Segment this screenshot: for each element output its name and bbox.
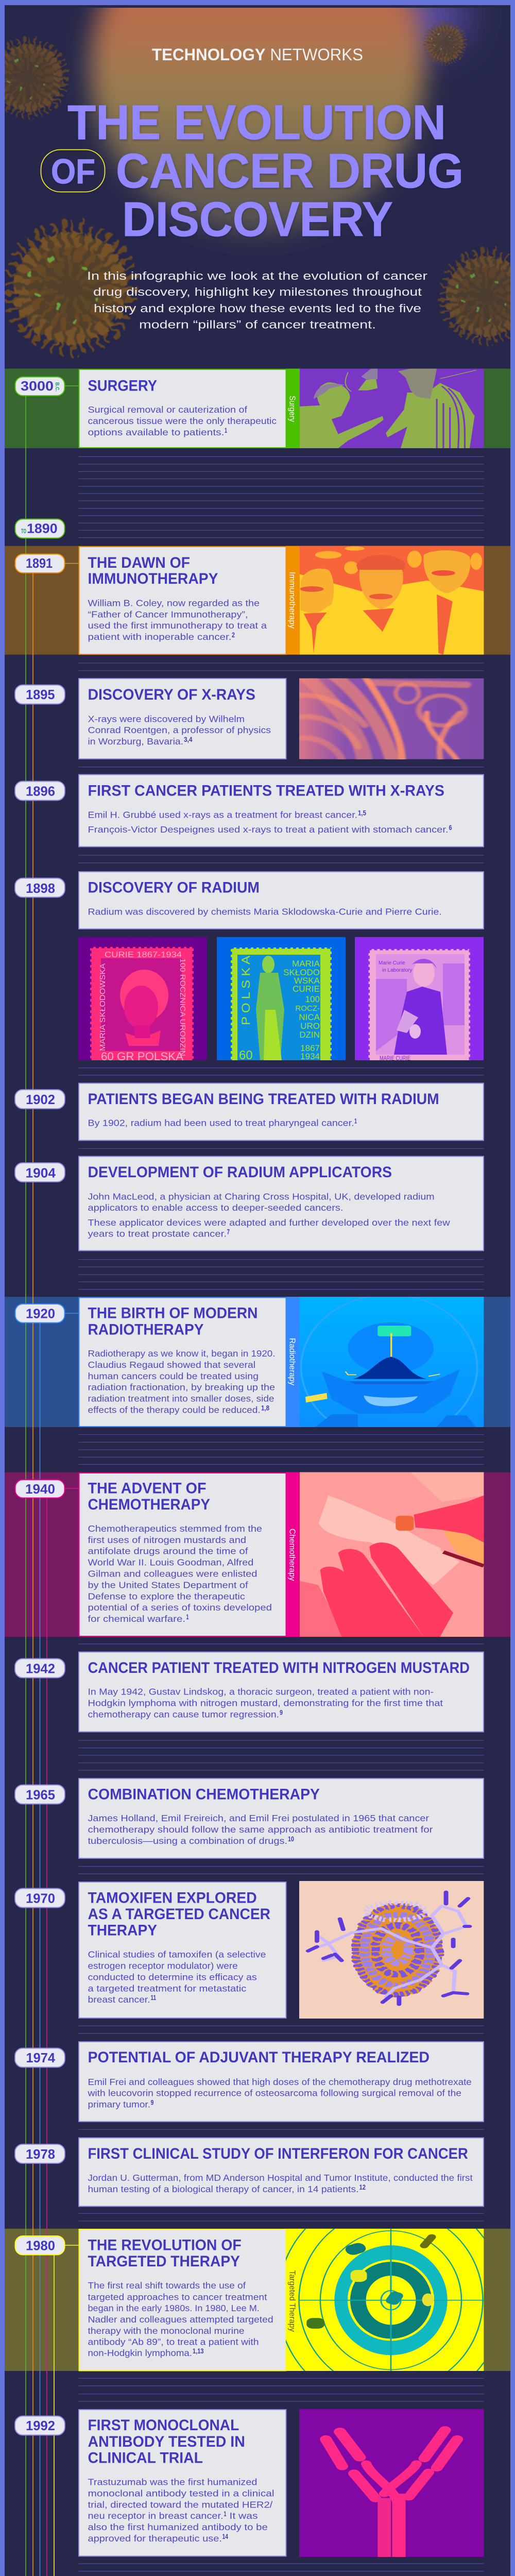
- body text: began in the early 1980s. In 1980, Lee M.: [88, 2303, 260, 2313]
- image: green Curie stamp: URO: [300, 1021, 320, 1031]
- category tag: Targeted Therapy: [287, 2270, 297, 2332]
- heading: PATIENTS BEGAN BEING TREATED WITH RADIUM: [88, 1091, 439, 1108]
- heading: TAMOXIFEN EXPLORED: [88, 1890, 257, 1907]
- event: 1896 first patients treated: [15, 775, 484, 847]
- body text: In May 1942, Gustav Lindskog, a thoracic surgeon, treated a patient with non-: [88, 1686, 434, 1697]
- body text: 1: [186, 1613, 189, 1621]
- heading: CHEMOTHERAPY: [88, 1496, 210, 1513]
- year pill: 1974: [26, 2050, 56, 2065]
- intro text: drug discovery, highlight key milestones throughout: [93, 285, 422, 298]
- image: pink Curie stamp: CURIE 1867-1934: [105, 951, 182, 959]
- event: 1965 combination chemotherapy: [15, 1778, 484, 1858]
- body text: trial, directed toward the mutated HER2/: [88, 2500, 272, 2510]
- category tag: Chemotherapy: [287, 1529, 297, 1581]
- body text: also the first humanized antibody to be: [88, 2522, 268, 2532]
- icon: cancer cell lower left: [9, 226, 132, 350]
- year pill: 1965: [26, 1787, 55, 1802]
- body text: Defense to explore the therapeutic: [88, 1591, 245, 1602]
- event: 1920 birth of radiotherapy: [15, 1295, 484, 1440]
- heading: IMMUNOTHERAPY: [88, 570, 218, 587]
- body text: human cancers could be treated using: [88, 1371, 259, 1381]
- image: purple Curie stamp: MARIE CURIE: [380, 1055, 410, 1062]
- year pill: [15, 1480, 65, 1498]
- body text: radiation treatment into smaller doses, side: [88, 1394, 274, 1404]
- icon: cancer cell top right: [425, 23, 465, 63]
- header glow and cells: [0, 0, 515, 350]
- body text: with leucovorin stopped recurrence of osteosarcoma following surgical removal of the: [87, 2088, 461, 2098]
- event: to 1890 pill: [15, 519, 65, 538]
- body text: therapy with the monoclonal murine: [88, 2326, 244, 2336]
- body text: antibody “Ab 89”, to treat a patient with: [88, 2337, 259, 2347]
- body text: The first real shift towards the use of: [88, 2280, 246, 2291]
- year pill: 1980: [26, 2238, 55, 2253]
- body text: Trastuzumab was the first humanized: [88, 2477, 257, 2487]
- title: [41, 95, 464, 247]
- image: green Curie stamp: [217, 937, 346, 1062]
- icon: cancer cell top left: [0, 41, 65, 115]
- body text: Nadler and colleagues attempted targeted: [88, 2314, 273, 2325]
- card: [79, 369, 286, 448]
- year pill: 1896: [26, 784, 55, 799]
- event: 1940 advent of chemotherapy: [15, 1472, 484, 1637]
- image: radiotherapy mask: [300, 1297, 484, 1427]
- body text: John MacLeod, a physician at Charing Cross Hospital, UK, developed radium: [88, 1191, 435, 1201]
- category tag: [286, 1472, 300, 1637]
- image: green Curie stamp: 1867: [300, 1043, 320, 1053]
- heading: CLINICAL TRIAL: [88, 2449, 203, 2467]
- body text: 12: [359, 2183, 366, 2191]
- body text: Radiotherapy as we know it, began in 1920.: [88, 1348, 275, 1359]
- heading: DEVELOPMENT OF RADIUM APPLICATORS: [88, 1164, 392, 1181]
- body text: [88, 1813, 433, 1846]
- image: pink Curie stamp: [78, 937, 207, 1063]
- heading: DISCOVERY OF X-RAYS: [88, 686, 255, 703]
- heading: COMBINATION CHEMOTHERAPY: [88, 1786, 320, 1803]
- card: [79, 1473, 286, 1636]
- year pill: [15, 1163, 65, 1182]
- heading: THE DAWN OF: [88, 554, 190, 571]
- heading: TARGETED THERAPY: [88, 2253, 240, 2270]
- body text: Jordan U. Gutterman, from MD Anderson Hospital and Tumor Institute, conducted the first: [88, 2173, 473, 2183]
- year pill: [15, 781, 65, 801]
- image: pink Curie stamp: MARIA SKŁODOWSKA: [98, 963, 107, 1051]
- event: 1902 treated with radium: [15, 1083, 484, 1141]
- heading: THE ADVENT OF: [88, 1480, 206, 1497]
- body text: neu receptor in breast cancer.: [88, 2511, 224, 2521]
- event: 1980 targeted therapy: [15, 2191, 504, 2409]
- heading: DISCOVERY OF RADIUM: [88, 879, 260, 896]
- body text: targeted approaches to cancer treatment: [88, 2292, 267, 2302]
- year pill: [15, 1659, 65, 1677]
- image: tamoxifen molecule and cell: [299, 1881, 484, 2019]
- body text: Surgical removal or cauterization of: [88, 404, 247, 415]
- body text: [88, 1348, 275, 1415]
- card: [79, 2138, 484, 2206]
- icon: cancer cell lower right: [442, 252, 515, 341]
- image: purple Curie stamp: [355, 937, 484, 1062]
- card: [79, 2410, 286, 2556]
- image: purple Curie stamp: in Laboratory: [382, 968, 412, 973]
- heading: CANCER PATIENT TREATED WITH NITROGEN MUSTARD: [88, 1659, 470, 1676]
- event: 3000 BC surgery: [15, 369, 484, 448]
- body text: 2: [232, 631, 235, 639]
- body text: [88, 1191, 450, 1239]
- body text: 6: [449, 823, 452, 832]
- image: target with pills: [286, 2229, 484, 2371]
- year pill: 1940: [25, 1481, 55, 1497]
- image: portrait of three men: [300, 546, 484, 655]
- event: 1891 dawn of immunotherapy: [15, 546, 484, 655]
- body text: [88, 2477, 274, 2544]
- body text: antifolate drugs around the time of: [88, 1546, 248, 1556]
- body text: X-rays were discovered by Wilhelm: [88, 714, 245, 724]
- body text: primary tumor.: [88, 2099, 150, 2110]
- image: purple Curie stamp: Marie Curie: [379, 960, 405, 966]
- category tag: Radiotherapy: [287, 1338, 297, 1385]
- card: [79, 2042, 484, 2122]
- intro text: modern “pillars” of cancer treatment.: [139, 318, 376, 331]
- body text: Claudius Regaud showed that several: [88, 1360, 255, 1370]
- year pill: 1942: [26, 1661, 55, 1676]
- event: 1904 radium applicators: [15, 1156, 484, 1251]
- body text: Radium was discovered by chemists Maria Sklodowska-Curie and Pierre Curie.: [88, 907, 442, 917]
- image: green Curie stamp: 1934: [300, 1052, 320, 1061]
- card: [79, 1882, 286, 2018]
- image: green Curie stamp: 60: [239, 1048, 253, 1062]
- year pill: [15, 878, 65, 897]
- body text: conducted to determine its efficacy as: [88, 1972, 257, 1982]
- body text: These applicator devices were adapted and further developed over the next few: [88, 1217, 450, 1228]
- coloured timeline routes into pillars: [26, 386, 443, 2576]
- year pill: 1904: [26, 1165, 56, 1181]
- body text: monoclonal antibody tested in a clinical: [88, 2488, 274, 2499]
- year pill: 1992: [26, 2418, 55, 2433]
- year pill: [15, 1785, 65, 1804]
- body text: 9: [280, 1708, 283, 1716]
- heading: [88, 1480, 210, 1513]
- body text: 1,5: [358, 809, 366, 817]
- heading: POTENTIAL OF ADJUVANT THERAPY REALIZED: [88, 2049, 430, 2066]
- card: [79, 1297, 286, 1427]
- category tag: Immunotherapy: [287, 572, 297, 629]
- heading: FIRST MONOCLONAL: [88, 2417, 239, 2434]
- body text: Emil Frei and colleagues showed that high doses of the chemotherapy drug methotrexate: [88, 2077, 472, 2087]
- body text: first uses of nitrogen mustards and: [88, 1535, 246, 1545]
- card: [79, 1778, 484, 1858]
- body text: approved for therapeutic use.: [88, 2533, 222, 2544]
- body text: Conrad Roentgen, a professor of physics: [88, 725, 271, 735]
- body text: potential of a series of toxins developed: [88, 1602, 272, 1613]
- event: to 1890 pill: 1890: [27, 521, 58, 536]
- category tag: Surgery: [287, 396, 297, 422]
- image: pink Curie stamp: 100 ROCZNICA URODZIN: [178, 958, 187, 1056]
- body text: 10: [288, 1835, 294, 1843]
- image: green Curie stamp: CURIE: [293, 984, 320, 994]
- image: green Curie stamp: 100: [305, 994, 320, 1004]
- body text: used the first immunotherapy to treat a: [88, 620, 267, 631]
- body text: [88, 598, 267, 642]
- event: 1898 discovery of radium: [15, 872, 484, 1071]
- event: 1992 monoclonal antibody: [15, 2409, 484, 2557]
- year pill: [15, 2048, 65, 2067]
- body text: William B. Coley, now regarded as the: [88, 598, 260, 608]
- category tag: [286, 1297, 300, 1427]
- heading: SURGERY: [88, 378, 157, 395]
- body text: chemotherapy can cause tumor regression.: [88, 1709, 279, 1719]
- body text: World War II. Louis Goodman, Alfred: [88, 1557, 253, 1568]
- heading: [88, 554, 218, 587]
- intro text: [87, 269, 427, 331]
- body text: effects of the therapy could be reduced.: [88, 1405, 261, 1415]
- image: pink Curie stamp: 60 GR POLSKA: [101, 1050, 183, 1063]
- image: chest x-ray: [299, 678, 484, 759]
- intro text: history and explore how these events led to the five: [94, 302, 421, 315]
- body text: breast cancer.: [88, 1994, 150, 2005]
- body text: patient with inoperable cancer.: [88, 632, 232, 642]
- heading: RADIOTHERAPY: [88, 1321, 204, 1338]
- image: green Curie stamp: WSKA: [294, 976, 320, 986]
- body text: 11: [150, 1993, 156, 2002]
- year pill: B.C.: [54, 382, 60, 392]
- image: gloved hands placing IV: [300, 1472, 484, 1637]
- body text: It was: [230, 2511, 258, 2521]
- body text: 14: [222, 2532, 228, 2540]
- body text: 1,8: [261, 1404, 269, 1412]
- body text: [88, 1686, 443, 1719]
- card: [79, 1652, 484, 1732]
- card: [79, 1156, 484, 1251]
- year pill: [15, 2144, 65, 2163]
- heading: FIRST CLINICAL STUDY OF INTERFERON FOR CANCER: [88, 2145, 468, 2162]
- body text: Gilman and colleagues were enlisted: [88, 1569, 258, 1579]
- body text: radiation fractionation, by breaking up the: [88, 1382, 275, 1393]
- title: THE EVOLUTION: [67, 95, 446, 150]
- year pill: [15, 1090, 65, 1109]
- year pill: [15, 554, 65, 573]
- year pill: 1920: [26, 1306, 55, 1321]
- heading: AS A TARGETED CANCER: [88, 1906, 270, 1923]
- card: [79, 775, 484, 847]
- title: OF: [51, 152, 95, 191]
- body text: Emil H. Grubbé used x-rays as a treatment for breast cancer.: [88, 810, 357, 820]
- image: green Curie stamp: NICA: [299, 1012, 320, 1022]
- event: 1970 tamoxifen: [15, 1881, 484, 2019]
- image: ancient vase figures: [300, 369, 484, 448]
- body text: for chemical warfare.: [88, 1614, 185, 1624]
- year pill: [15, 1889, 65, 1907]
- body text: [88, 1949, 266, 2005]
- year pill: 1898: [26, 880, 55, 896]
- body text: Hodgkin lymphoma with nitrogen mustard, demonstrating for the first time that: [88, 1698, 443, 1708]
- body text: [88, 404, 277, 437]
- heading: ANTIBODY TESTED IN: [88, 2433, 245, 2450]
- image: green Curie stamp: ROCZ-: [296, 1004, 320, 1013]
- year pill: [15, 2236, 65, 2255]
- body text: by the United States Department of: [88, 1580, 248, 1590]
- heading: THERAPY: [88, 1922, 157, 1939]
- category tag: [286, 546, 300, 655]
- card: [79, 1083, 484, 1141]
- year pill: [15, 2416, 65, 2435]
- body text: “Father of Cancer Immunotherapy”,: [88, 609, 248, 619]
- year pill: [15, 685, 65, 704]
- event: 1974 adjuvant therapy: [15, 2042, 484, 2122]
- year pill: [15, 377, 65, 396]
- year pill: 1891: [26, 555, 53, 571]
- body text: [88, 1523, 272, 1624]
- body text: chemotherapy should follow the same approach as antibiotic treatment for: [88, 1824, 433, 1835]
- heading: [88, 2417, 245, 2467]
- body text: estrogen receptor modulator) were: [88, 1960, 238, 1971]
- body text: [88, 2173, 473, 2194]
- image: antibody: [299, 2409, 484, 2557]
- card: [79, 679, 286, 759]
- year pill: 1895: [26, 687, 55, 702]
- body text: 1: [354, 1117, 357, 1125]
- heading: THE REVOLUTION OF: [88, 2237, 242, 2254]
- body text: 1: [224, 2510, 227, 2518]
- body text: 7: [227, 1228, 230, 1236]
- body text: [88, 809, 452, 835]
- title: DISCOVERY: [122, 192, 393, 247]
- body text: in Worzburg, Bavaria.: [88, 736, 183, 747]
- separator rules: [78, 456, 484, 2576]
- body text: James Holland, Emil Freireich, and Emil Frei postulated in 1965 that cancer: [88, 1813, 429, 1823]
- body text: [88, 714, 271, 747]
- card: [79, 2229, 286, 2371]
- body text: cancerous tissue were the only therapeutic: [88, 416, 277, 426]
- logo: TECHNOLOGY NETWORKS: [152, 45, 363, 64]
- event: to 1890 pill: TO: [21, 528, 26, 535]
- heading: [88, 1890, 270, 1939]
- body text: applicators to enable access to deeper-seeded cancers.: [88, 1202, 343, 1213]
- card: [79, 872, 484, 929]
- year pill: 1970: [26, 1891, 55, 1906]
- body text: Chemotherapeutics stemmed from the: [88, 1523, 262, 1534]
- event: 1942 nitrogen mustard: [15, 1652, 484, 1732]
- body text: options available to patients.: [88, 427, 225, 437]
- image: green Curie stamp: P O L S K A: [239, 956, 252, 1025]
- body text: [87, 2077, 472, 2110]
- timeline colour bands: [5, 369, 510, 2371]
- event: 1978 interferon: [15, 2138, 484, 2206]
- heading: [88, 1305, 258, 1338]
- category tag: [286, 369, 300, 448]
- intro text: In this infographic we look at the evolution of cancer: [87, 269, 427, 282]
- image: green Curie stamp: MARIA: [292, 959, 320, 969]
- body text: 3,4: [184, 735, 193, 743]
- year pill: [15, 1304, 65, 1323]
- body text: [88, 2280, 273, 2358]
- heading: THE BIRTH OF MODERN: [88, 1305, 258, 1322]
- body text: 9: [150, 2098, 154, 2107]
- body text: Clinical studies of tamoxifen (a selective: [88, 1949, 266, 1959]
- body text: tuberculosis—using a combination of drugs.: [88, 1836, 287, 1846]
- title: CANCER DRUG: [116, 144, 464, 198]
- body text: non-Hodgkin lymphoma.: [88, 2348, 192, 2358]
- year pill: 3000: [21, 378, 54, 394]
- body text: 1: [225, 426, 227, 434]
- image: green Curie stamp: SKŁODO: [283, 968, 320, 977]
- body text: 1,13: [193, 2347, 204, 2355]
- heading: FIRST CANCER PATIENTS TREATED WITH X-RAYS: [88, 783, 444, 800]
- image: green Curie stamp: DZIN: [299, 1030, 320, 1040]
- body text: By 1902, radium had been used to treat pharyngeal cancer.: [88, 1118, 354, 1128]
- body text: human testing of a biological therapy of cancer, in 14 patients.: [88, 2184, 358, 2194]
- body text: a targeted treatment for metastatic: [88, 1983, 247, 1993]
- card: [79, 547, 286, 654]
- event: 1895 discovery of x-rays: [15, 676, 484, 762]
- year pill: 1978: [26, 2146, 55, 2162]
- body text: François-Victor Despeignes used x-rays to treat a patient with stomach cancer.: [88, 824, 448, 835]
- body text: years to treat prostate cancer.: [88, 1229, 227, 1239]
- heading: [88, 2237, 242, 2270]
- year pill: 1902: [26, 1092, 55, 1107]
